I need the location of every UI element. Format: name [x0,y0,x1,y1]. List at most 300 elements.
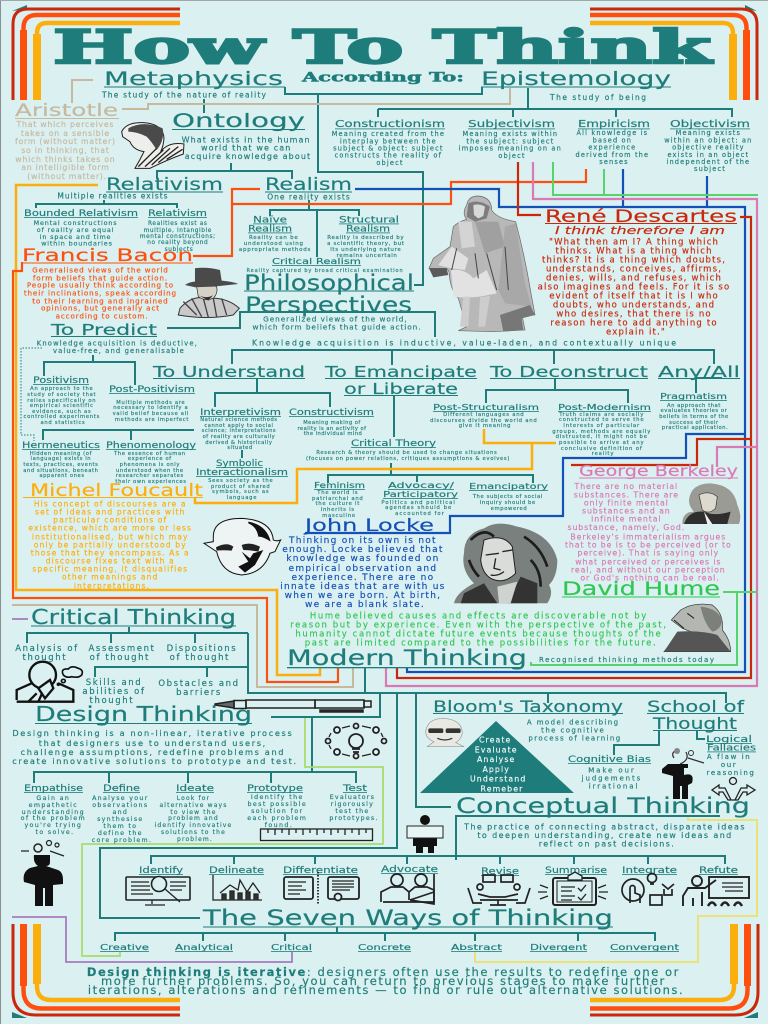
Constructionism: Constructionism [335,119,445,130]
panel: George Berkeley: substances. There are [574,490,679,500]
Objectivism: exists in an object [667,151,749,159]
panel: John Locke: when we are born. At birth, [285,591,441,601]
panel: Aristotle [15,101,119,181]
panel: To Deconstruct: Different languages and [443,412,524,418]
panel: To Emancipate or Liberate: Critical Theory [351,439,436,449]
panel: Bloom's Taxonomy: the cognitive [541,726,605,734]
panel: School of Thought: School of [647,697,744,716]
panel: John Locke: innate ideas that are with us [280,582,446,592]
panel: School of Thought: our [721,761,737,769]
panel: René Descartes: understands, conceives, affirms, [546,264,722,274]
labels: conceptual tasks: Revise [481,867,519,877]
panel: To Deconstruct: discourses divide the world and [430,418,537,424]
panel: To Emancipate or Liberate: inquiry should be [480,500,536,506]
panel: To Emancipate or Liberate: To Emancipate [324,363,477,381]
panel: Bloom's Taxonomy: Create [479,736,511,744]
Subjectivism [459,119,565,160]
panel: To Predict: controlled experiments [24,414,100,420]
panel: George Berkeley: George Berkeley [579,462,738,480]
panel: Realism: its underlying nature [330,247,401,253]
panel: Realism: One reality exists [267,192,351,202]
icon: crossroads [712,778,755,800]
panel: To Understand [152,363,374,501]
panel: John Locke [280,516,450,610]
panel: John Locke: Thinking on its own is not [288,536,437,546]
panel: To Deconstruct: give it meaning [459,423,511,429]
panel: Conceptual Thinking: to deepen understanding, create new ideas and [477,831,733,840]
connector lines: Aristotle tan [12,80,510,687]
panel: John Locke: we are a blank slate. [305,600,425,610]
panel: Realism: Structural [339,216,399,226]
step: Prototype: each problem [247,815,307,822]
panel: To Emancipate or Liberate: (focuses on power relations, critiques assumptions & evolves) [306,456,510,462]
panel: To Predict: Hidden meaning (of [30,451,92,457]
panel: To Predict [22,321,201,485]
panel: To Emancipate or Liberate: the culture it [315,501,360,507]
step: Test: test the [335,808,369,815]
panel: John Locke: empirical observation and [289,564,437,574]
icon: Berkeley portrait [682,483,740,524]
panel: To Understand: cannot apply to social [204,423,273,429]
panel: To Predict: The essence of human [113,451,186,457]
panel: René Descartes: who desires, that there is no [556,310,712,320]
panel: Critical Thinking: Critical Thinking [31,605,236,629]
panel: René Descartes: also imagines and feels. For it is so [538,282,730,292]
panel: To Emancipate or Liberate: Feminism [314,481,365,490]
panel: To Understand: Sees society as the [208,478,273,484]
panel: branches of epistemology [332,119,756,173]
step: Prototype: Prototype [247,784,303,794]
panel: To Emancipate or Liberate: Advocacy/ [388,481,454,490]
panel: To Predict: Multiple methods are [116,400,185,406]
step: Test: prototypes. [329,815,379,822]
panel: George Berkeley: substance, namely, God. [567,523,685,532]
panel: David Hume: reason but by experience. Even with the perspective of the past, [290,620,667,630]
panel: To Emancipate or Liberate: or Liberate [344,380,458,398]
step: Empathise: you're trying [24,822,82,829]
panel: David Hume: past are limited compared to the possibilities for the future. [305,638,657,648]
Constructionism: Meaning created from the [332,130,445,138]
step: Empathise: to solve. [36,829,74,836]
panel: Critical Thinking: of thought [90,653,150,663]
connector lines: Berkeley pink [386,162,757,686]
panel: Conceptual Thinking: The practice of connecting abstract, disparate ideas [463,822,746,832]
panel: René Descartes: evident of itself that it is I who [549,292,719,302]
panel: Critical Thinking: of thought [170,653,230,663]
panel: Realism: Reality captured by broad critical examination [246,268,404,274]
panel: To Deconstruct: constructed to serve the [559,417,644,423]
Objectivism: within an object: an [664,136,753,144]
panel: Philosophical Perspectives: Generalized views of the world, [263,314,408,324]
heading: Metaphysics: Metaphysics [104,68,283,90]
panel: To Predict: evidence, such as [32,409,91,415]
panel: Conceptual Thinking [456,794,750,848]
panel: Realism: Naïve [253,216,287,226]
text: inductive knowledge: Knowledge acquisition is inductive, value-laden, and contextually unique [252,338,676,348]
panel: Realism: remains uncertain [336,253,398,259]
panel: Michel Foucault: His concept of discourses are a [34,500,187,508]
panel: Bloom's Taxonomy [420,697,623,794]
step: Empathise: of the problem [21,815,86,822]
panel: Critical Thinking [15,605,240,706]
step: Define: define the [98,830,143,837]
panel: John Locke: John Locke [304,516,434,536]
panel: School of Thought: Logical [706,735,752,745]
panel: To Understand: product of shared [211,484,271,490]
panel: Realism: Critical Realism [272,257,361,266]
panel: Relativism [24,175,223,253]
panel: Realism: Reality can be [249,235,299,241]
heading: Epistemology [481,68,671,102]
panel: Relativism: Relativism [148,209,207,219]
step: Define: synthesise [97,816,144,823]
panel: Philosophical Perspectives: Philosophical [244,271,414,295]
panel: To Deconstruct: groups, methods are equally [552,429,651,435]
decorative corner stripes: bottom left [12,924,180,1018]
panel: Relativism: Multiple realities exists [57,192,169,200]
step: Prototype: best possible [247,801,307,808]
panel: To Understand: derived & historically [205,440,273,446]
step: Test [329,784,379,822]
Objectivism: objective reality [672,144,745,152]
labels: conceptual tasks: Identify [139,866,183,876]
panel: To Emancipate or Liberate: accounted for [395,511,445,517]
panel: Michel Foucault: discourse fixes text with a [46,556,175,566]
Empiricism [576,119,652,166]
step: Ideate: Look for [177,795,210,802]
step: Prototype: found. [265,822,293,829]
Empiricism: All knowledge is [576,129,648,137]
icon: ruler [260,829,372,840]
panel: Ontology: Ontology [172,110,305,132]
panel: Any/All: beliefs in terms of the [659,414,729,420]
step: Ideate: solutions to the [161,829,226,836]
panel: School of Thought [568,697,757,790]
step: Define: Define [103,784,140,794]
Empiricism: derived from the [576,151,649,159]
panel: School of Thought: Make our [588,766,636,774]
panel: George Berkeley: only finite mental [584,498,669,508]
step: Define: them to [103,823,137,830]
panel: To Predict: methods are imperfect [115,417,189,423]
Objectivism: independent of the [666,158,750,166]
panel: Realism: Realism [248,224,292,234]
panel: Relativism: Bounded Relativism [24,209,138,219]
icon: thinking man [21,840,64,906]
panel: Realism: a scientific theory, but [327,241,405,247]
panel: Design Thinking: that designers use to understand users, [39,738,267,748]
panel: To Deconstruct [430,363,654,457]
step: Define: and [112,809,128,816]
panel: To Predict: Phenomenology [106,441,196,451]
step: Ideate: problem. [177,836,213,843]
icon: Bacon portrait [178,268,239,317]
panel: The Seven Ways of Thinking: Critical [271,943,312,952]
panel: Aristotle: an intelligible form [21,163,110,172]
connector lines: Locke blue [305,169,746,672]
panel: Critical Thinking: thought [23,653,67,663]
step: Empathise: empathetic [29,802,78,809]
panel: Relativism: Relativism [106,175,223,195]
panel: Critical Thinking: Dispositions [167,644,237,654]
panel: George Berkeley: perceive). That is saying only [577,548,719,558]
Constructionism: constructs the reality of [335,152,442,160]
panel: School of Thought: Cognitive Bias [568,755,652,765]
labels: conceptual tasks: Integrate [622,866,677,876]
panel: To Predict: To Predict [50,321,157,339]
panel: School of Thought: judgements [581,774,642,782]
panel: Critical Thinking: abilities of [82,687,146,697]
panel: Bloom's Taxonomy: A model describing [527,718,619,726]
Objectivism [664,119,756,173]
panel: School of Thought: A flaw in [707,753,751,761]
panel: Critical Thinking: barriers [176,688,222,698]
panel: To Understand: Interactionalism [196,468,288,478]
labels: conceptual tasks: Summarise [545,866,607,876]
panel: To Understand: Natural science methods [200,417,278,423]
panel: Francis Bacon: to their learning and ingrained [32,296,169,306]
panel: Modern Thinking: Modern Thinking [287,646,527,670]
icon: integrate gear and bulb [622,874,674,905]
panel: Aristotle: Aristotle [15,101,118,121]
panel: To Understand: language [227,495,257,501]
panel: René Descartes: reason here to add anything to [550,318,718,328]
panel: To Emancipate or Liberate: inherits is [321,507,355,513]
panel: David Hume [290,578,720,648]
icon: advocate people [381,874,434,904]
panel: Critical Thinking: Obstacles and [158,679,240,689]
panel: To Deconstruct: interests of particular [563,423,640,429]
panel: George Berkeley [565,462,738,582]
panel: Relativism: mental constructions; [140,234,216,240]
icon: pen [215,700,371,712]
panel: The Seven Ways of Thinking: The Seven Ways of Thinking [202,906,613,930]
panel: Realism [239,175,407,274]
step: Define: Analyse your [92,795,149,802]
panel: Critical Thinking: thought [90,696,134,706]
panel: Relativism: multiple, intangible [144,228,212,234]
icon: Hume portrait [664,604,731,652]
panel: Aristotle: (without matter). [27,172,107,181]
Constructionism [332,119,448,167]
panel: George Berkeley: what perceived or perceives is [575,558,721,566]
panel: To Emancipate or Liberate: Emancipatory [469,482,548,491]
panel: To Understand: science; interpretations [202,428,276,434]
panel: To Predict: texts, practices, events [23,462,98,468]
heading: Metaphysics: The study of the nature of reality [101,90,267,100]
panel: To Predict: experience of [128,456,172,462]
panel: To Deconstruct: Post-Modernism [558,403,651,412]
labels: conceptual tasks: Delineate [209,866,264,876]
panel: Realism: appropriate methods [239,247,311,253]
panel: To Predict: and statistics [40,420,86,426]
panel: To Emancipate or Liberate: Participatory [383,490,458,499]
panel: To Predict: Positivism [33,376,89,386]
panel: School of Thought: irrational [589,782,639,790]
panel: Francis Bacon [22,246,193,320]
panel: John Locke: experience. There are no [292,573,434,583]
panel: Aristotle: which thinks takes on [15,155,116,164]
icon: man with open head [662,748,704,799]
panel: To Understand: of reality are culturally [203,434,275,440]
heading: Epistemology: The study of being [549,93,646,102]
panel: To Understand: situated [227,445,253,451]
panel: Aristotle: so in thinking, that [21,146,110,155]
panel: Francis Bacon: opinions, but generally act [41,304,160,312]
panel: Philosophical Perspectives: Perspectives [245,293,412,317]
connector lines: dotted [21,348,42,441]
icon: Descartes statue [429,196,535,332]
panel: Relativism: in space and time [40,233,111,241]
panel: To Emancipate or Liberate: Research & theory should be used to change situations [316,450,497,456]
panel: George Berkeley: substances and an [582,506,671,516]
Subjectivism: Meaning exists within [463,130,558,138]
panel: Realism: Reality is described by [327,235,404,241]
step: Ideate [155,784,235,843]
text: closing note: iterations, alterations and refinements — to find or rule out alternative solutions. [88,983,684,997]
panel: To Deconstruct: reality [592,451,614,457]
panel: Design Thinking: Design thinking is a non-linear, iterative process [12,728,293,738]
panel: To Emancipate or Liberate: Politics and political [381,500,456,506]
panel: To Predict: and situations, beneath [23,468,99,474]
panel: Ontology: What exists in the human [182,136,311,144]
subtitle: according to: According To: [300,70,464,86]
step: Empathise: Gain an [36,795,70,802]
step: Ideate: identify innovative [155,822,232,829]
panel: Any/All: evaluates theories or [661,408,728,414]
panel: Design Thinking [12,702,379,844]
panel: René Descartes: denies, wills, and refuses, which [546,274,722,284]
icon: thinker [17,662,82,702]
panel: The Seven Ways of Thinking: Abstract [451,943,502,952]
connector lines: teal tree [27,87,732,941]
panel: Philosophical Perspectives [244,271,422,332]
panel: Realism: Realism [265,175,352,195]
panel: Design Thinking: create innovative solutions to prototype and test. [12,756,298,766]
panel: Realism: Realism [346,224,390,234]
panel: To Understand: Symbolic [216,459,263,469]
icon: identify monitor [126,876,190,905]
step: Ideate: problem and [168,815,219,822]
panel: Bloom's Taxonomy: Remeber [481,784,523,794]
text: closing note: more further problems. So, you can return to previous stages to make further [101,974,666,988]
panel: Any/All: Any/All [658,363,740,381]
step: Prototype: solution for [251,808,304,815]
panel: To Predict: apparent ones [39,473,85,479]
icon: summarise clipboard [538,872,608,905]
panel: Critical Thinking: Assessment [88,644,156,654]
panel: George Berkeley: There are no material [574,482,678,491]
Constructionism: interplay between the [340,138,437,146]
step: Empathise: Empathise [24,784,83,794]
panel: Relativism: subjects [165,247,193,253]
connector lines: Bacon orange [13,169,586,682]
panel: David Hume: humanity cannot dictate future events because thoughts of the [295,630,662,640]
panel: George Berkeley: real, and without our perception [571,566,726,574]
panel: To Understand: symbols, such as [212,489,269,495]
panel: To Predict: valid belief because all [113,411,189,417]
panel: To Predict: Post-Positivism [109,385,195,395]
panel: Michel Foucault: those that they encompass. As a [31,548,190,558]
step: Ideate: alternative ways [159,802,228,809]
labels: conceptual tasks: Advocate [381,865,438,875]
panel: George Berkeley: or God's nothing can be real. [580,574,720,582]
icon: man holding sign [407,815,443,853]
panel: Any/All: success of their [669,420,719,426]
panel: School of Thought: Thought [652,714,737,733]
Empiricism: experience [588,144,636,152]
panel: Francis Bacon: Francis Bacon [22,246,193,266]
connector lines: lime [82,718,383,956]
step: Test: rigorously [331,801,374,808]
panel: To Understand: Constructivism [289,408,374,418]
panel: Francis Bacon: their inclinations, speak according [24,288,177,298]
panel: To Deconstruct: possible to arrive at any [559,440,644,446]
panel: To Deconstruct: Post-Structuralism [433,403,539,412]
panel: John Locke: knowledge was founded on [286,554,440,564]
title: How To Think [53,20,713,74]
panel: Michel Foucault: particular conditions of [53,516,167,524]
panel: René Descartes: I think therefore I am [555,224,725,237]
panel: To Deconstruct: distrusted, it might not be [556,434,648,440]
icon: Locke portrait [454,524,557,603]
heading: Epistemology: Epistemology [481,68,671,90]
panel: To Predict: value-free, and generalisable [53,347,185,355]
panel: René Descartes: René Descartes [545,207,737,227]
panel: Francis Bacon: People usually think according to [27,280,174,290]
panel: To Predict: necessary to identify a [113,405,188,411]
panel: The Seven Ways of Thinking: Creative [100,943,149,952]
panel: To Predict: researcher separates [116,473,184,479]
panel: Critical Thinking: Skills and [86,678,142,688]
panel: Michel Foucault: other meanings and [62,572,158,582]
text: closing note: Design thinking is iterative: designers often use the results to redefine one or [87,965,680,979]
icon: Foucault portrait [204,518,281,575]
panel: Modern Thinking: Recognised thinking methods today [539,656,714,664]
connector lines: Hume green [531,162,758,665]
panel: Conceptual Thinking: reflect on past decisions. [539,840,675,848]
step: Test: Evaluators [330,794,375,801]
labels: conceptual tasks: Differentiate [283,866,358,876]
panel: To Predict: relies specifically on [27,398,96,404]
icon: delineate chart [213,875,262,900]
Objectivism: Objectivism [670,119,750,130]
decorative corner stripes: bottom right [590,924,758,1018]
panel: To Understand: To Understand [152,363,305,381]
panel: Bloom's Taxonomy: Understand [470,774,526,784]
panel: Michel Foucault: only be partially understood by [34,540,187,550]
Empiricism: Empiricism [578,119,650,130]
panel: René Descartes: "What then am I? A thing which [549,238,719,248]
connector lines: Foucault yellow [16,185,556,675]
panel: To Emancipate or Liberate: agendas should be [385,505,452,511]
panel: To Understand: Meaning making of [303,420,361,426]
icon: lightbulb network [326,724,386,758]
panel: David Hume: Hume believed causes and effects are discoverable not by [310,612,648,622]
Objectivism: Meaning exists [676,129,741,137]
panel: Francis Bacon: according to custom. [56,312,148,320]
panel: The Seven Ways of Thinking: Analytical [175,943,233,952]
panel: René Descartes: thinks. What is a thing which [555,246,713,256]
panel: To Understand: the individual mind [304,431,362,437]
Constructionism: subject & object: subject [333,144,444,152]
panel: Ontology [172,110,314,161]
panel: Ontology: acquire knowledge about [185,152,311,161]
Subjectivism: object [498,152,526,160]
panel: René Descartes: doubts, who understands, and [553,300,715,310]
panel: To Deconstruct: To Deconstruct [489,363,648,381]
panel: René Descartes [538,207,737,338]
